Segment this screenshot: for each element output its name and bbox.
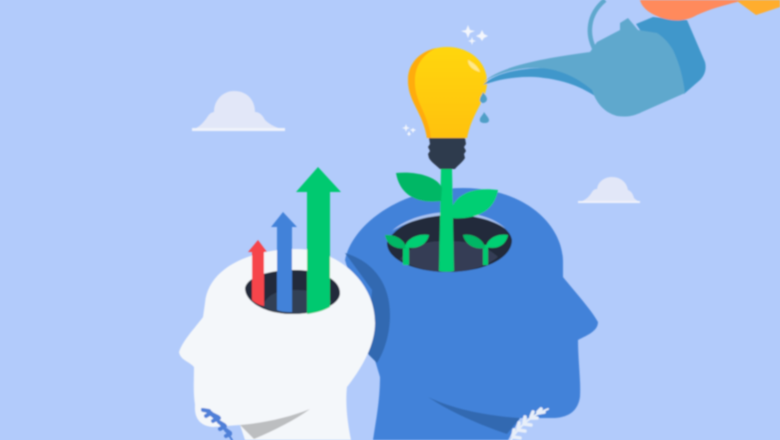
bulb screw base	[428, 138, 466, 169]
sparkles: left	[402, 124, 416, 136]
arrow: blue	[271, 212, 297, 312]
white head	[179, 167, 375, 440]
sprout: right	[463, 235, 508, 265]
sprout: left	[385, 235, 429, 265]
spout underside	[483, 68, 595, 96]
can body	[483, 18, 685, 117]
water drops	[480, 92, 489, 123]
shadow band behind white head	[345, 253, 390, 363]
arrow: red	[248, 240, 267, 306]
stem	[439, 168, 454, 272]
light bulb	[408, 47, 487, 169]
wheat sprig: left	[202, 409, 232, 440]
sparkles: top	[461, 25, 488, 45]
bulb highlight	[468, 60, 480, 72]
plant stem and leaves	[396, 168, 498, 272]
wheat sprig: right	[511, 409, 548, 440]
head opening	[245, 270, 340, 314]
leaf: right	[449, 189, 498, 218]
jaw shadow	[428, 397, 520, 434]
arrow: green	[296, 167, 341, 314]
bulb glass	[408, 47, 487, 138]
cloud: right	[578, 177, 640, 203]
handle	[590, 0, 605, 50]
cloud: left	[192, 91, 285, 131]
sleeve: yellow	[737, 0, 780, 15]
watering can	[483, 0, 706, 117]
hand: orange	[640, 0, 745, 20]
can back	[636, 17, 706, 94]
bulb left shade	[408, 48, 436, 138]
neck shadow	[240, 409, 310, 439]
head opening with plants	[385, 212, 512, 272]
blue head	[345, 188, 598, 440]
leaf: left	[396, 173, 442, 202]
